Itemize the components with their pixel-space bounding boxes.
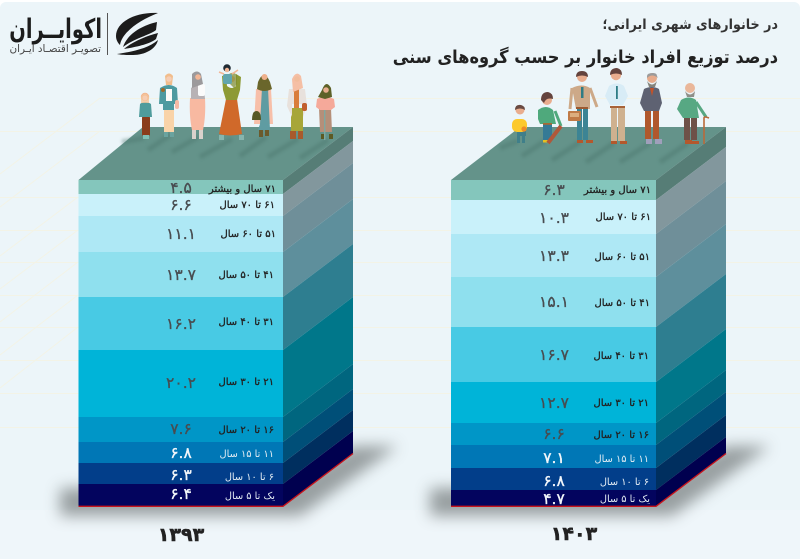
front face bands (78, 180, 283, 506)
band labels: یک تا ۵ سال (225, 491, 275, 502)
woman pink coat (252, 74, 273, 137)
band labels: ۱۱ تا ۱۵ سال (220, 449, 274, 460)
band values: ۷.۶ (170, 420, 192, 438)
band labels: ۳۱ تا ۴۰ سال (593, 351, 649, 362)
figures: men and boys (512, 68, 709, 144)
band values: ۱۰.۳ (539, 209, 569, 227)
band values: ۶.۶ (170, 196, 192, 214)
band labels: ۶ تا ۱۰ سال (225, 472, 274, 483)
small boy (512, 105, 527, 143)
logo (9, 13, 158, 55)
band values: ۶.۳ (170, 466, 192, 484)
band values: ۱۳.۳ (539, 247, 569, 265)
band values: ۶.۸ (543, 472, 565, 490)
ground shadow right block (430, 446, 770, 516)
band values: ۲۰.۲ (166, 374, 196, 392)
ground shadow left block (60, 446, 398, 516)
band values: ۱۲.۷ (539, 394, 569, 412)
band values: ۱۱.۱ (166, 225, 196, 243)
band labels (208, 184, 276, 502)
logo divider (107, 13, 108, 55)
front face bands (451, 180, 656, 506)
band labels: ۴۱ تا ۵۰ سال (594, 298, 650, 309)
band labels: ۲۱ تا ۳۰ سال (218, 377, 274, 388)
band labels (583, 185, 651, 505)
band values: ۱۶.۷ (539, 346, 569, 364)
band values: ۷.۱ (543, 449, 565, 467)
band labels: ۶ تا ۱۰ سال (600, 477, 649, 488)
band labels: ۶۱ تا ۷۰ سال (219, 200, 275, 211)
band values: ۶.۸ (170, 444, 192, 462)
top face with shadows (451, 127, 726, 180)
teen with skateboard (538, 92, 561, 143)
band values: ۶.۳ (543, 181, 565, 199)
band values: ۱۶.۲ (166, 315, 196, 333)
year label 1393: ۱۳۹۳ (158, 524, 205, 546)
woman gray hijab (190, 72, 205, 139)
mother with child (219, 64, 244, 140)
band values: ۶.۴ (170, 485, 192, 503)
band labels: ۷۱ سال و بیشتر (583, 185, 651, 196)
figures: women and girl (139, 64, 335, 140)
top face with shadows (78, 127, 353, 180)
logo tagline: تصویـر اقتصـاد ایـران (10, 43, 101, 55)
band labels: ۶۱ تا ۷۰ سال (595, 212, 651, 223)
band labels: ۴۱ تا ۵۰ سال (218, 270, 274, 281)
year label 1403: ۱۴۰۳ (551, 523, 598, 545)
band values: ۴.۷ (543, 490, 565, 508)
band values: ۶.۶ (543, 425, 565, 443)
band values: ۱۳.۷ (166, 266, 196, 284)
logo mark (116, 13, 158, 55)
band labels: یک تا ۵ سال (600, 494, 650, 505)
band labels: ۵۱ تا ۶۰ سال (594, 252, 650, 263)
title: درصد توزیع افراد خانوار بر حسب گروه‌های سنی (393, 46, 778, 68)
elderly man with cane (677, 83, 709, 144)
band values (166, 179, 196, 503)
band labels: ۱۶ تا ۲۰ سال (218, 425, 274, 436)
band values: ۴.۵ (170, 179, 192, 197)
band values (539, 181, 569, 508)
girl (139, 93, 152, 139)
logo wordmark: اکوایــران (9, 13, 102, 45)
older man in vest (640, 73, 662, 144)
band labels: ۱۱ تا ۱۵ سال (595, 454, 649, 465)
band values: ۱۵.۱ (539, 293, 569, 311)
stacked block 1403 (451, 127, 726, 508)
band labels: ۵۱ تا ۶۰ سال (220, 229, 276, 240)
band labels: ۳۱ تا ۴۰ سال (218, 317, 274, 328)
band labels: ۷۱ سال و بیشتر (208, 184, 276, 195)
band labels: ۲۱ تا ۳۰ سال (593, 398, 649, 409)
elderly woman (316, 84, 335, 140)
man in blue shirt (605, 68, 628, 144)
side face bands (656, 127, 726, 506)
man with briefcase (568, 71, 597, 143)
woman teal jacket (159, 74, 179, 137)
subtitle: در خانوارهای شهری ایرانی؛ (602, 17, 778, 33)
woman light coat (287, 74, 307, 139)
stacked block 1393 (78, 127, 353, 506)
side face bands (283, 127, 353, 506)
band labels: ۱۶ تا ۲۰ سال (593, 430, 649, 441)
base edge (78, 454, 353, 506)
base edge (451, 454, 726, 506)
